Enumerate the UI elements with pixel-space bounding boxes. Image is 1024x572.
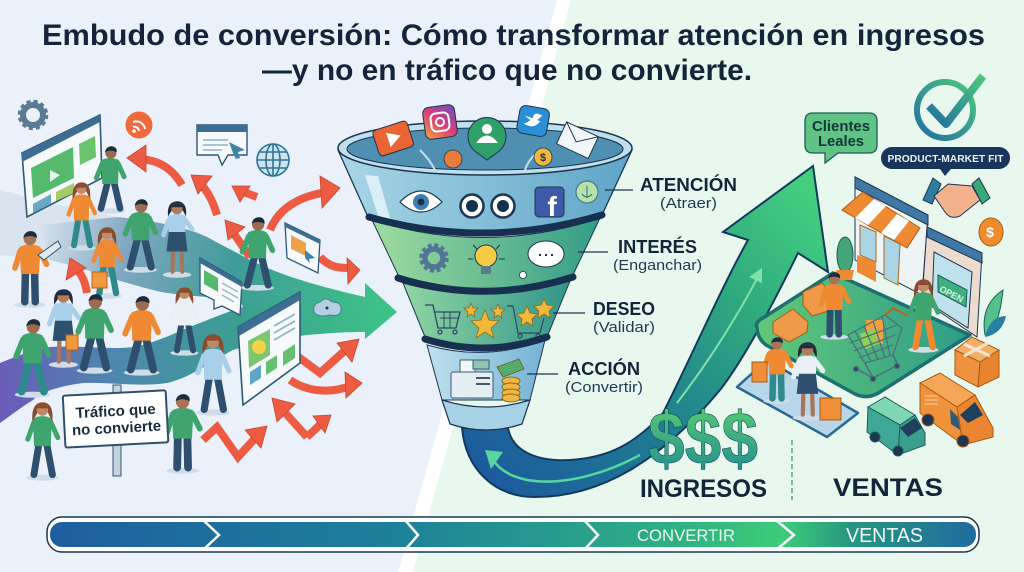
dollar signs: $$$ [648,397,758,480]
potted plant [836,237,854,280]
icon: video [372,120,414,157]
icon: cash register [451,360,493,398]
funnel stage: atención [338,150,632,233]
label: acción: (Convertir) [565,379,643,396]
sign: tráfico que no convierte: no convierte [72,418,162,439]
icon: instagram [422,104,458,140]
red bouncing arrows [66,145,362,457]
store floor platform [757,273,970,397]
bottom progress bar [47,517,979,552]
label: atención [605,174,737,212]
label: interés: INTERÉS [618,236,697,257]
orange van [920,373,993,447]
icon: coins in rim: $ [540,152,546,164]
icon: anchor bubble [576,181,598,203]
funnel stage: acción [427,340,545,430]
icon: gear [421,245,447,271]
icon: light bulb [468,245,505,274]
icon: twitter [516,105,550,137]
open sign [938,275,967,307]
icon: banknotes and coins [497,359,524,402]
small blue platform [737,360,858,437]
badge: product-market fit: PRODUCT-MARKET FIT [888,154,1004,165]
striped awning [842,192,920,248]
teal van [867,397,925,456]
traffic ribbon flowing into the funnel [0,190,397,423]
sign: tráfico que no convierte [63,385,168,476]
funnel stage: deseo [403,281,570,346]
title: —y no en tráfico que no convierte. [262,54,752,87]
label: deseo: DESEO [593,299,655,319]
badge: product-market fit [881,147,1010,176]
label: deseo [553,299,655,336]
illustration: store and sales [737,177,1006,456]
title: Embudo de conversión: Cómo transformar atención en ingresos [42,19,985,52]
icon: speech bubble [520,241,564,278]
label: atención: (Atraer) [660,195,717,212]
label: atención: ATENCIÓN [640,174,737,195]
icon: globe [257,144,289,176]
step: ventas: VENTAS [846,525,923,547]
icon: cart outline [507,306,544,338]
funnel stage labels [527,174,737,396]
step: convertir: CONVERTIR [637,526,735,545]
conversion funnel [338,104,632,430]
icon: rss [126,112,152,138]
icon: coin: $ [986,224,994,240]
shopping bags and laptop [38,241,107,350]
icon: user pin [468,118,506,160]
sign: tráfico que no convierte: Tráfico que [75,401,156,422]
funnel dark rings [369,215,602,348]
label: acción [527,358,643,396]
icon: stars [464,299,554,338]
browser window: video page [22,115,102,217]
big parcel [955,337,999,387]
callout: clientes leales [805,113,877,163]
icon: coin [979,218,1003,246]
icon: handshake [923,178,990,217]
browser card with cursor [197,125,247,165]
funnel rim [338,121,632,175]
icon: cart [425,305,460,334]
icon: facebook [535,187,564,222]
people walking through traffic [14,146,274,481]
icon: facebook: f [547,191,557,222]
funnel stage: interés [372,218,600,291]
label: acción: ACCIÓN [568,358,640,379]
title [42,19,985,87]
label: interés [578,236,702,274]
icon: eye [400,191,442,212]
store building [855,177,982,337]
open sign: OPEN [938,284,965,304]
callout: clientes leales: Leales [818,133,864,150]
icon: eyeballs [460,194,514,218]
label: deseo: (Validar) [593,319,655,336]
callout: clientes leales: Clientes [812,118,870,135]
big return arrow from funnel to loyal customers [462,166,828,497]
icon: gear [20,102,46,128]
boxes on floor [773,283,833,342]
label: ingresos: INGRESOS [640,475,767,503]
icon: coins in rim [444,148,552,168]
chat screen with cursor [285,223,320,273]
leaves [984,290,1006,337]
icon: mail [557,122,598,158]
icon: cloud [314,299,341,316]
store customers [763,272,939,421]
label: interés: (Enganchar) [613,257,702,274]
icon: check mark badge [917,76,983,138]
middle browser screen [200,258,242,315]
label: ventas: VENTAS [833,474,943,502]
shopping bags [752,362,841,420]
large browser screen with smiley [238,292,300,405]
shopping cart [848,308,908,382]
